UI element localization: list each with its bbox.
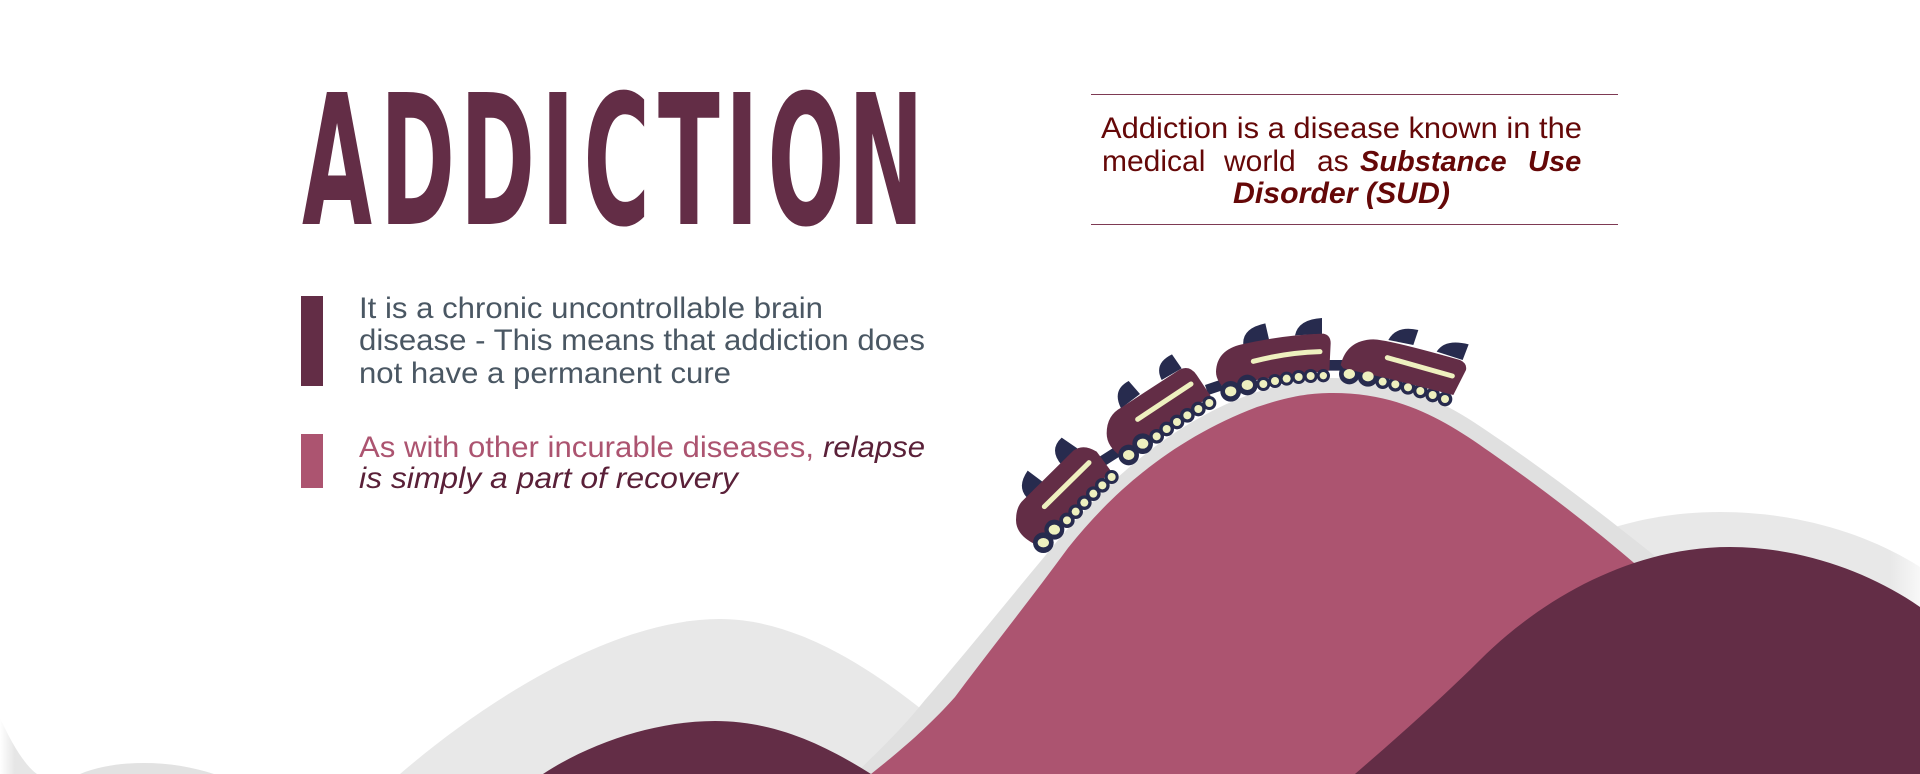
callout text: Substance <box>1360 146 1507 178</box>
hill: grey right back <box>1600 512 1920 774</box>
callout: definition <box>1091 94 1618 225</box>
bullet: relapse <box>301 431 925 495</box>
car 2 <box>1107 354 1216 465</box>
callout text: Use <box>1528 146 1581 178</box>
hill: maroon right <box>1355 547 1920 774</box>
bullet text: relapse <box>823 431 925 464</box>
title: ADDICTION <box>302 56 924 267</box>
hill: grey ridge behind pink <box>855 378 1660 774</box>
track connectors <box>1102 365 1345 462</box>
callout text: as <box>1317 145 1349 178</box>
hill: pink roller coaster <box>871 393 1640 774</box>
roller coaster train <box>1016 318 1469 553</box>
callout text: Disorder (SUD) <box>1233 177 1450 210</box>
bullet bar <box>301 434 323 488</box>
bullet: chronic disease <box>301 292 925 390</box>
hill: maroon left <box>543 721 871 774</box>
hill: small grey bottom left <box>80 763 214 774</box>
bullet text: It is a chronic uncontrollable brain <box>359 292 823 325</box>
bullet text <box>359 431 925 495</box>
bullet text: is simply a part of recovery <box>359 462 740 495</box>
callout text <box>1101 112 1582 210</box>
callout text: world <box>1223 145 1296 178</box>
hill: large grey centre <box>400 619 925 774</box>
bullet text: disease - This means that addiction does <box>359 324 925 357</box>
car 1 <box>1016 438 1119 553</box>
car 4 <box>1339 329 1469 406</box>
bullet text: not have a permanent cure <box>359 357 731 390</box>
callout text: Addiction is a disease known in the <box>1101 112 1582 145</box>
hill: left corner grey <box>0 718 37 774</box>
callout text: medical <box>1102 145 1205 178</box>
car 3 <box>1216 318 1331 402</box>
bullet bar <box>301 296 323 386</box>
bullet text <box>359 292 925 390</box>
background hills <box>0 378 1920 774</box>
bullet text: As with other incurable diseases, <box>359 431 814 464</box>
